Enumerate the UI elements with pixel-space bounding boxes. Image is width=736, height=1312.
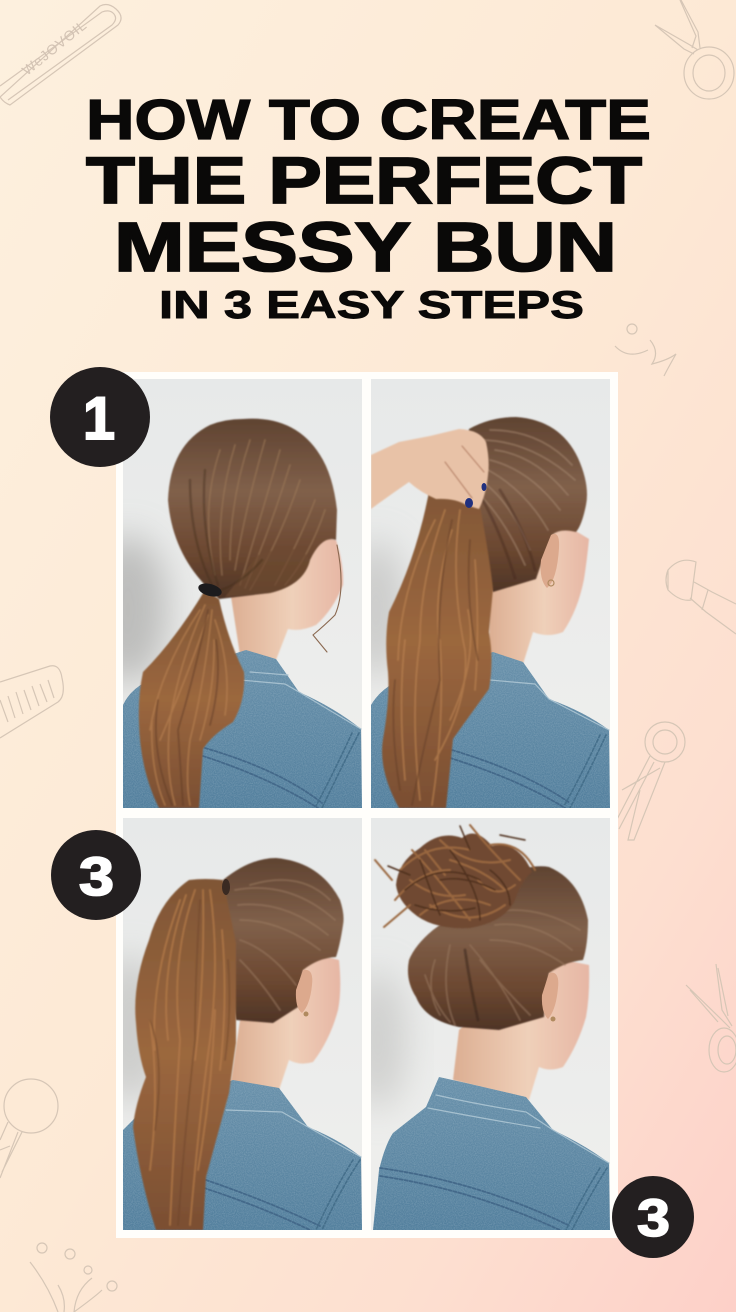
title: IN 3 EASY STEPS	[159, 284, 584, 327]
photo frame	[116, 372, 618, 1238]
title: HOW TO CREATE	[86, 88, 651, 152]
badge: step number 3 right	[612, 1176, 694, 1258]
ear	[542, 973, 558, 1019]
hair tie	[198, 583, 222, 597]
badge: step number 1	[50, 367, 150, 467]
title: THE PERFECT	[86, 143, 642, 217]
doodle: hair clip right	[613, 722, 685, 840]
head hair	[168, 419, 337, 599]
title: MESSY BUN	[114, 208, 617, 286]
arm and hand	[371, 429, 489, 509]
neck and face	[453, 955, 589, 1100]
head hair	[468, 416, 588, 593]
denim jacket	[123, 650, 362, 808]
nail polish	[465, 483, 486, 508]
doodle: comb tag top left: WeJOVOIL	[19, 16, 90, 78]
title	[86, 88, 651, 327]
ear	[541, 534, 559, 588]
doodle: swirl	[615, 324, 676, 376]
neck and face	[489, 530, 590, 663]
badge: step number 3 left: 3	[79, 847, 114, 907]
doodle: sprig bottom left	[30, 1243, 117, 1312]
loose strand	[313, 545, 341, 652]
doodle: round brush bottom left	[0, 1079, 58, 1178]
panel: step 4 finished messy bun	[350, 818, 610, 1232]
hair tie	[222, 879, 230, 895]
messy bun	[375, 825, 535, 928]
badge: step number 3 left	[51, 830, 141, 920]
neck and face	[230, 530, 343, 660]
falling hair	[382, 475, 493, 808]
panel: step 2 gathering hair	[348, 379, 610, 808]
badge: step number 1: 1	[83, 385, 115, 452]
head hair	[223, 858, 344, 1023]
doodle: scissors top right	[655, 0, 734, 99]
ponytail	[139, 590, 244, 808]
neck and face	[231, 950, 340, 1090]
denim jacket	[123, 1080, 362, 1232]
doodle: comb tag top left	[0, 5, 121, 105]
ponytail	[133, 879, 236, 1230]
badge: step number 3 right: 3	[637, 1189, 670, 1248]
doodle: comb left	[0, 666, 63, 738]
panel: step 1 loose ponytail	[123, 379, 362, 808]
denim jacket	[371, 652, 610, 808]
panel: step 3 high ponytail	[123, 818, 362, 1230]
doodle: scissors lower right	[686, 964, 736, 1072]
doodle: hair dryer right	[666, 560, 736, 634]
ear	[296, 970, 312, 1013]
head hair	[408, 866, 588, 1030]
denim jacket	[373, 1077, 610, 1232]
